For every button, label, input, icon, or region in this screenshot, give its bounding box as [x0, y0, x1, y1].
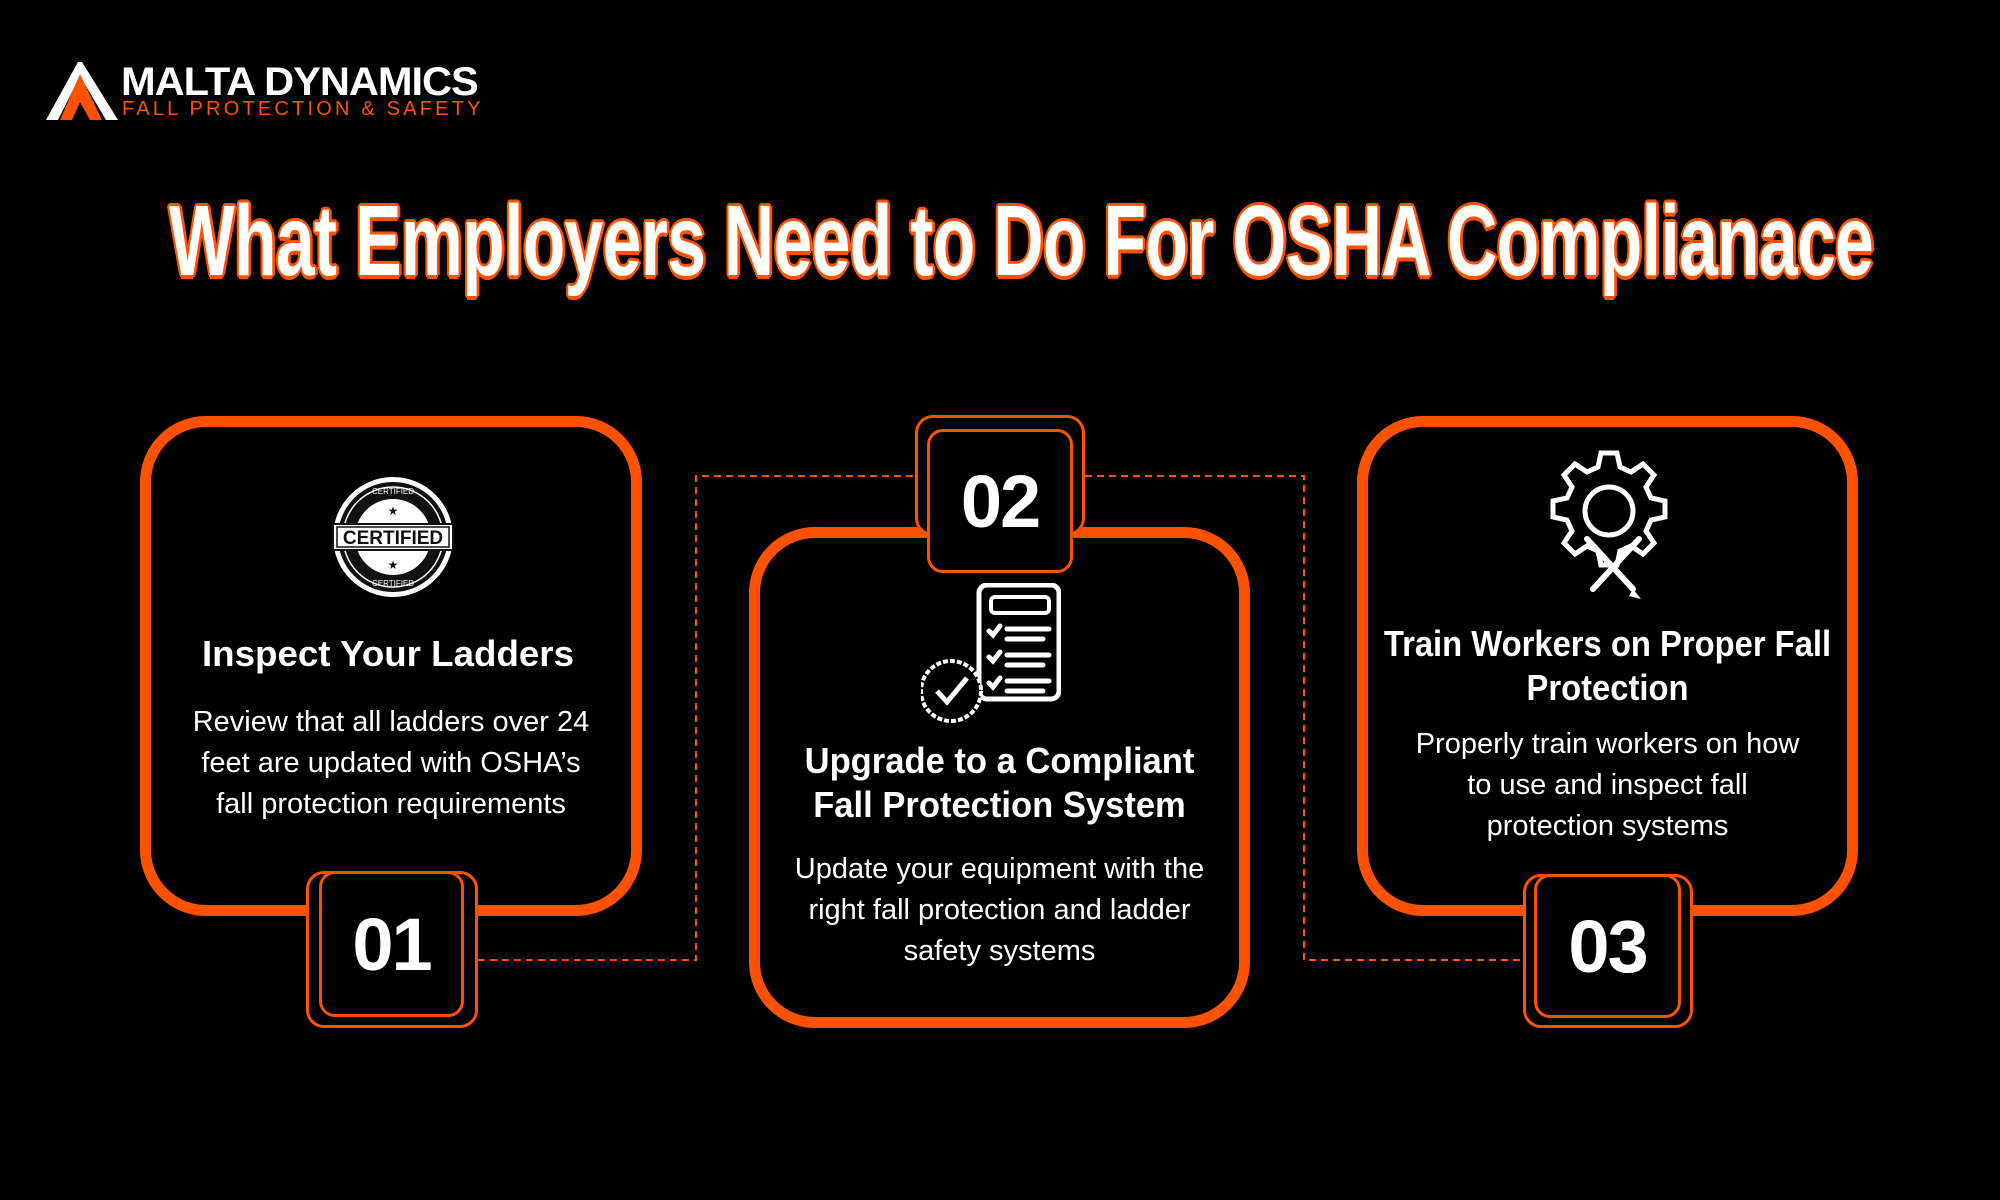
body text: right fall protection and ladder [808, 894, 1191, 926]
icon: logo peak [46, 62, 118, 120]
number box 01 [306, 871, 478, 1028]
icon: checklist [921, 583, 1061, 723]
icon: certified badge: CERTIFIED [343, 528, 443, 549]
body text: protection systems [1487, 810, 1728, 842]
body text [1416, 728, 1800, 842]
heading: Inspect Your Ladders [202, 633, 574, 674]
icon: certified badge [332, 477, 454, 597]
heading: Protection [1526, 667, 1688, 708]
body text: Update your equipment with the [795, 853, 1204, 885]
heading: Fall Protection System [813, 784, 1186, 825]
number box 02 [915, 415, 1085, 573]
panel: step 3 [1357, 416, 1858, 1028]
body text: Properly train workers on how [1416, 728, 1799, 760]
logo [46, 60, 484, 120]
panel: step 1 [140, 416, 642, 1028]
icon: certified badge: CERTIFIED [372, 579, 414, 588]
icon: certified badge: ★ [388, 504, 398, 518]
icon: gear with tools [1550, 450, 1668, 599]
number box 03 [1523, 874, 1693, 1028]
heading: Train Workers on Proper Fall [1384, 623, 1831, 664]
number box 02: 02 [961, 460, 1039, 542]
body text: Review that all ladders over 24 [193, 706, 589, 738]
body text [193, 706, 589, 820]
logo: FALL PROTECTION & SAFETY [122, 98, 484, 120]
body text: feet are updated with OSHA’s [201, 747, 581, 779]
body text: safety systems [904, 935, 1095, 967]
icon: certified badge: CERTIFIED [372, 487, 414, 496]
number box 01: 01 [352, 902, 431, 986]
logo text: MALTA DYNAMICS [121, 60, 478, 104]
body text: fall protection requirements [216, 788, 566, 820]
body text: to use and inspect fall [1467, 769, 1748, 801]
body text [795, 853, 1204, 967]
heading: Upgrade to a Compliant [805, 740, 1194, 781]
number box 03: 03 [1568, 904, 1647, 988]
title: What Employers Need to Do For OSHA Complianace [169, 185, 1873, 297]
panel: step 2 [749, 415, 1250, 1028]
icon: certified badge: ★ [388, 558, 398, 572]
heading [1384, 623, 1831, 708]
heading [805, 740, 1194, 825]
